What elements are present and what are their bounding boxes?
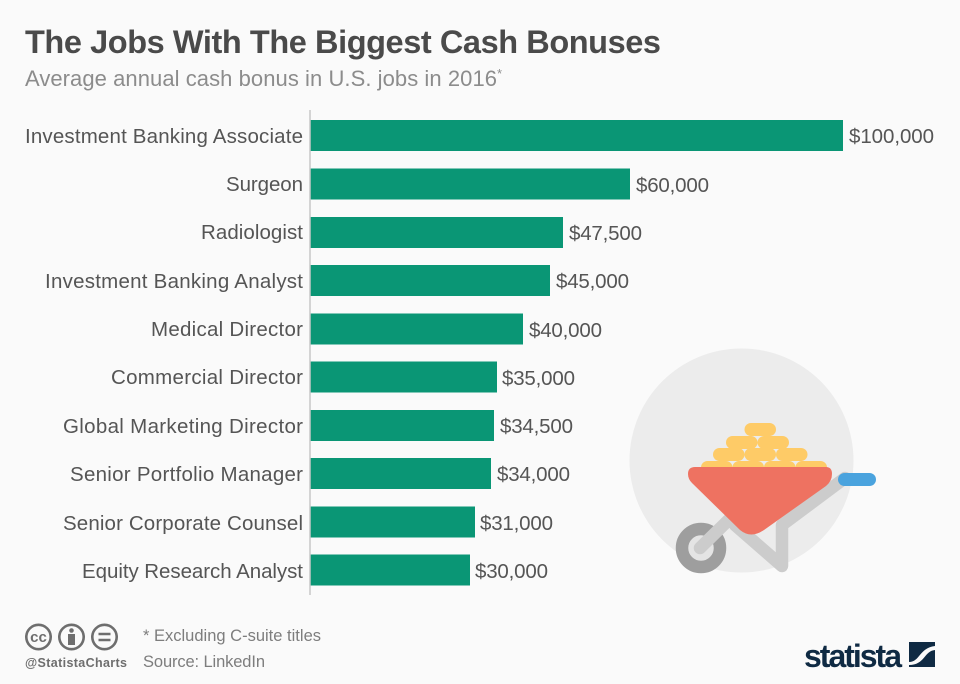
value labels: $45,000 (556, 270, 629, 293)
subtitle: * (497, 66, 502, 81)
category labels: Medical Director (151, 318, 303, 341)
icon: wheelbarrow with gold (630, 348, 876, 572)
category labels: Senior Corporate Counsel (63, 512, 303, 535)
icon: attribution (59, 625, 84, 649)
value labels: $35,000 (502, 367, 575, 390)
value labels: $34,000 (497, 463, 570, 486)
icon: statista mark (909, 642, 935, 667)
wheel (682, 529, 720, 567)
footnote: * Excluding C-suite titles (143, 627, 321, 645)
bars (310, 120, 843, 586)
source: Source: LinkedIn (143, 653, 265, 671)
category labels: Surgeon (226, 173, 303, 196)
frame (700, 478, 845, 566)
subtitle: Average annual cash bonus in U.S. jobs in 2016 (25, 66, 497, 91)
value labels: $40,000 (529, 319, 602, 342)
category labels: Investment Banking Analyst (45, 270, 303, 293)
category labels (25, 125, 303, 583)
category labels: Commercial Director (111, 366, 303, 389)
category labels: Senior Portfolio Manager (70, 463, 303, 486)
title: The Jobs With The Biggest Cash Bonuses (25, 24, 661, 60)
icon: cc: cc (30, 629, 47, 646)
category labels: Investment Banking Associate (25, 125, 303, 148)
category labels: Equity Research Analyst (82, 560, 303, 583)
value labels: $30,000 (475, 560, 548, 583)
tray (688, 467, 832, 534)
value labels: $47,500 (569, 222, 642, 245)
handle: @StatistaCharts (25, 656, 127, 670)
icon: no derivatives (92, 625, 117, 649)
statista logo: statista (804, 638, 902, 674)
value labels: $31,000 (480, 512, 553, 535)
footer: licence icons (26, 625, 117, 649)
value labels (475, 125, 934, 583)
value labels: $34,500 (500, 415, 573, 438)
handle (838, 473, 876, 486)
value labels: $100,000 (849, 125, 934, 148)
gold bars (701, 423, 827, 474)
value labels: $60,000 (636, 174, 709, 197)
category labels: Radiologist (201, 221, 303, 244)
category labels: Global Marketing Director (63, 415, 303, 438)
bar chart (25, 110, 934, 595)
